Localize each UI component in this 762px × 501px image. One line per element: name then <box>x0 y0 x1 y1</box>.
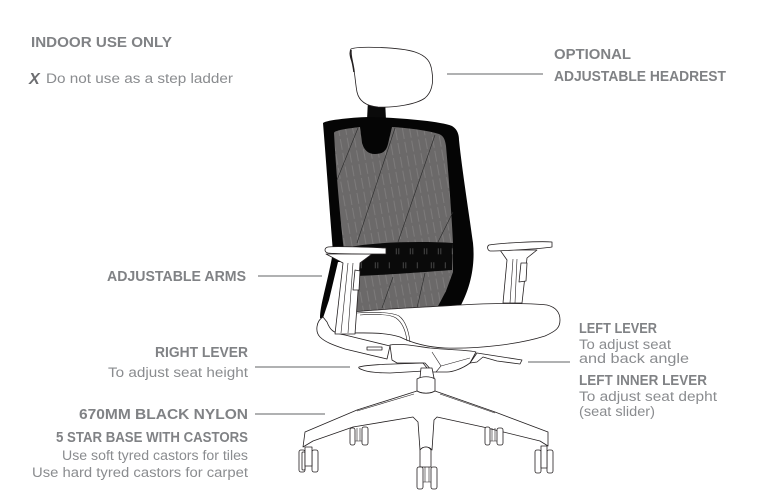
right lever <box>359 363 427 373</box>
seat mechanism <box>317 317 522 372</box>
label: left lever: LEFT LEVER <box>579 321 657 337</box>
label: left lever: and back angle <box>579 351 689 366</box>
heading: indoor use only: INDOOR USE ONLY <box>31 35 172 51</box>
leader: base <box>255 413 325 415</box>
lumbar support band <box>350 242 453 276</box>
mesh back <box>334 127 453 312</box>
mesh seam lines <box>337 128 453 308</box>
label: base and castors: 5 STAR BASE WITH CASTORS <box>56 430 248 446</box>
label: right lever: To adjust seat height <box>108 365 248 380</box>
left lever <box>470 353 522 364</box>
label: right lever: RIGHT LEVER <box>155 345 248 361</box>
left arm post rear <box>488 242 552 303</box>
leader: right lever <box>255 366 350 368</box>
label: right lever <box>108 345 248 380</box>
icon: cross mark: X <box>28 71 41 88</box>
left arm pad <box>488 242 552 251</box>
chair illustration <box>299 47 560 489</box>
label: base and castors: Use soft tyred castors for tiles <box>62 448 248 463</box>
label: optional adjustable headrest: OPTIONAL <box>554 47 631 63</box>
leader: arms <box>258 275 322 277</box>
gas lift column <box>417 368 435 393</box>
back frame <box>320 117 474 318</box>
label: left lever: To adjust seat <box>579 337 671 352</box>
right arm <box>325 247 386 334</box>
label: optional adjustable headrest: ADJUSTABLE HEADREST <box>554 69 726 85</box>
five star base <box>303 391 548 467</box>
label: base and castors: 670MM BLACK NYLON <box>79 407 248 423</box>
label: left lever <box>579 321 689 366</box>
warning: step ladder: Do not use as a step ladder <box>46 71 234 86</box>
leader: left lever <box>528 361 570 363</box>
label: optional adjustable headrest <box>554 47 726 85</box>
castors <box>299 427 553 489</box>
label: left inner lever: (seat slider) <box>579 404 655 419</box>
label: left inner lever: LEFT INNER LEVER <box>579 373 707 389</box>
seat cushion <box>352 304 560 348</box>
leader: headrest <box>447 73 543 75</box>
label: left inner lever <box>579 373 717 419</box>
headrest <box>350 47 433 120</box>
label: left inner lever: To adjust seat depht <box>579 389 717 404</box>
label: base and castors: Use hard tyred castors for carpet <box>32 465 248 480</box>
label: adjustable arms: ADJUSTABLE ARMS <box>107 269 246 285</box>
label: base and castors <box>32 407 248 480</box>
